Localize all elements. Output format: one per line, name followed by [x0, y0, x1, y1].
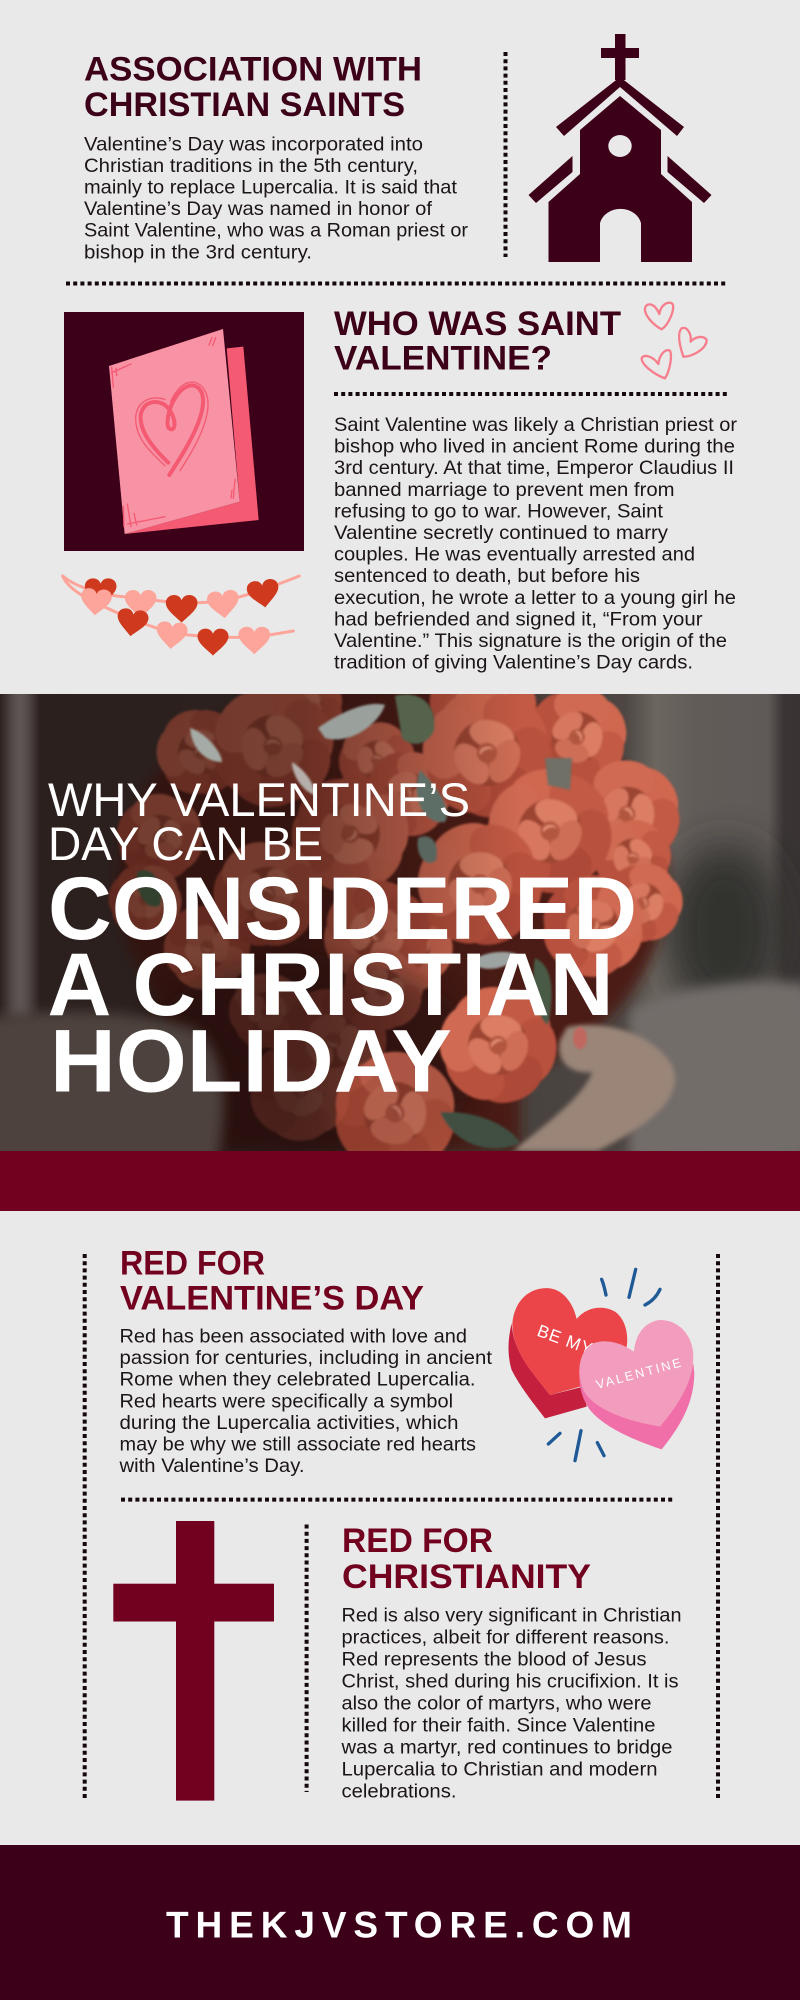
- text block: saints paragraph: Valentine’s Day was incorporated into: [84, 134, 423, 156]
- heading: red for Valentine's Day: RED FOR: [120, 1245, 265, 1283]
- title: why Valentine's Day can be considered a Christian holiday: A CHRISTIAN: [48, 934, 614, 1034]
- text block: saints paragraph: mainly to replace Lupercalia. It is said that: [84, 176, 458, 198]
- panel: who was Saint Valentine: [63, 303, 738, 674]
- text block: red for Christianity paragraph: Red represents the blood of Jesus: [342, 1648, 647, 1670]
- icon: candy hearts: VALENTINE: [594, 1356, 682, 1392]
- leaves: [395, 694, 434, 744]
- text block: Saint Valentine paragraph: bishop who lived in ancient Rome during the: [334, 436, 735, 458]
- icon: candy hearts: BE MY: [535, 1320, 596, 1359]
- heading: red for Valentine's Day: VALENTINE’S DAY: [120, 1280, 424, 1318]
- text block: Saint Valentine paragraph: Valentine secretly continued to marry: [334, 522, 668, 544]
- title: why Valentine's Day can be considered a Christian holiday: HOLIDAY: [50, 1010, 452, 1110]
- text block: red for Valentine's Day paragraph: Rome when they celebrated Lupercalia.: [120, 1369, 476, 1391]
- heading: red for Christianity: RED FOR: [342, 1522, 493, 1560]
- heading: association with Christian saints: CHRISTIAN SAINTS: [84, 86, 405, 124]
- text block: Saint Valentine paragraph: execution, he wrote a letter to a young girl he: [334, 587, 736, 609]
- text block: red for Christianity paragraph: killed for their faith. Since Valentine: [342, 1714, 656, 1736]
- text block: Saint Valentine paragraph: banned marriage to prevent men from: [334, 479, 674, 501]
- text block: Saint Valentine paragraph: couples. He was eventually arrested and: [334, 544, 695, 566]
- text block: Saint Valentine paragraph: tradition of giving Valentine’s Day cards.: [334, 652, 693, 674]
- text block: red for Valentine's Day paragraph: [118, 1325, 493, 1477]
- panel: association with Christian saints: [84, 34, 712, 264]
- title: why Valentine's Day can be considered a Christian holiday: [48, 774, 637, 1110]
- text block: saints paragraph: Valentine’s Day was named in honor of: [84, 198, 433, 220]
- text block: saints paragraph: [84, 134, 469, 264]
- heading: who was Saint Valentine: WHO WAS SAINT: [334, 305, 621, 343]
- text block: red for Valentine's Day paragraph: Red has been associated with love and: [120, 1325, 467, 1347]
- text block: red for Christianity paragraph: also the color of martyrs, who were: [342, 1693, 652, 1715]
- text block: Saint Valentine paragraph: Saint Valentine was likely a Christian priest or: [334, 414, 738, 436]
- heading: association with Christian saints: ASSOCIATION WITH: [84, 50, 422, 88]
- icon: crimson cross: [113, 1521, 274, 1801]
- text block: Saint Valentine paragraph: had befriended and signed it, “From your: [334, 608, 703, 630]
- title: why Valentine's Day can be considered a Christian holiday: WHY VALENTINE’S: [48, 774, 470, 827]
- text block: saints paragraph: Christian traditions in the 5th century,: [84, 155, 418, 177]
- text block: red for Christianity paragraph: celebrations.: [342, 1781, 456, 1803]
- heading: red for Christianity: [342, 1522, 591, 1596]
- footer website text: THEKJVSTORE.COM: [166, 1904, 632, 1945]
- text block: red for Christianity paragraph: [340, 1604, 682, 1803]
- text block: red for Valentine's Day paragraph: passion for centuries, including in ancient: [120, 1347, 493, 1369]
- heading: who was Saint Valentine: VALENTINE?: [334, 340, 552, 378]
- text block: Saint Valentine paragraph: 3rd century. At that time, Emperor Claudius II: [334, 457, 734, 479]
- heading: who was Saint Valentine: [334, 305, 621, 378]
- icon: heart garland: [63, 576, 299, 656]
- icon: church: [528, 34, 712, 262]
- text block: Saint Valentine paragraph: sentenced to death, but before his: [334, 565, 640, 587]
- text block: red for Christianity paragraph: was a martyr, red continues to bridge: [340, 1736, 672, 1758]
- text block: Saint Valentine paragraph: [334, 414, 738, 674]
- heading: red for Valentine's Day: [120, 1245, 424, 1318]
- icon: candy hearts: [509, 1269, 694, 1461]
- text block: saints paragraph: bishop in the 3rd century.: [84, 242, 312, 264]
- text block: red for Valentine's Day paragraph: during the Lupercalia activities, which: [120, 1412, 458, 1434]
- text block: red for Valentine's Day paragraph: may be why we still associate red hearts: [120, 1433, 476, 1455]
- title: why Valentine's Day can be considered a Christian holiday: CONSIDERED: [48, 858, 637, 958]
- panel: hero photo with title: [0, 623, 800, 1205]
- photo: hands holding rose bouquet: [0, 623, 800, 1205]
- heading: association with Christian saints: [84, 50, 422, 124]
- icon: three outline hearts: [642, 303, 707, 378]
- text block: red for Valentine's Day paragraph: Red hearts were specifically a symbol: [120, 1390, 453, 1412]
- text block: saints paragraph: Saint Valentine, who was a Roman priest or: [84, 220, 469, 242]
- text block: red for Christianity paragraph: Lupercalia to Christian and modern: [342, 1759, 658, 1781]
- text block: Saint Valentine paragraph: refusing to go to war. However, Saint: [334, 500, 664, 522]
- title: why Valentine's Day can be considered a Christian holiday: DAY CAN BE: [48, 818, 323, 871]
- band: crimson divider: [0, 1151, 800, 1211]
- hands and sleeves: [0, 1012, 675, 1170]
- text block: red for Christianity paragraph: Christ, shed during his crucifixion. It is: [342, 1671, 679, 1693]
- text block: Saint Valentine paragraph: Valentine.” This signature is the origin of the: [334, 630, 727, 652]
- text block: red for Christianity paragraph: practices, albeit for different reasons.: [342, 1626, 670, 1648]
- text block: red for Christianity paragraph: Red is also very significant in Christian: [342, 1604, 682, 1626]
- panel: red symbolism: [85, 1245, 718, 1803]
- shadow over the left side of the bouquet: [0, 694, 520, 1151]
- image: valentine card on dark square: [64, 312, 304, 551]
- heading: red for Christianity: CHRISTIANITY: [342, 1558, 591, 1596]
- footer: [0, 1845, 800, 2000]
- text block: red for Valentine's Day paragraph: with Valentine’s Day.: [118, 1455, 304, 1477]
